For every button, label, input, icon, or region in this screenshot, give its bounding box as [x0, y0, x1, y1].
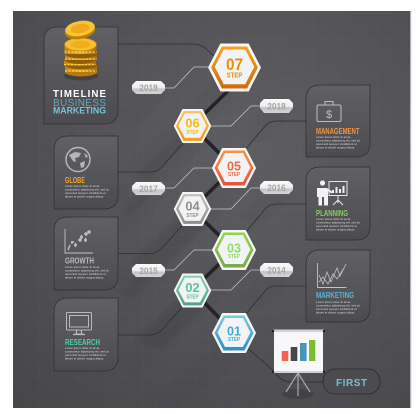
body text: growth: consectetur adipisicing elit, sed do: [65, 268, 110, 272]
title text: MARKETING: [53, 106, 106, 116]
body text: planning: Lorem ipsum dolor sit amet,: [316, 217, 351, 221]
body text: globe: Lorem ipsum dolor sit amet,: [65, 184, 100, 188]
body text: planning: [316, 217, 361, 232]
body text: research: consectetur adipisicing elit, sed do: [65, 350, 110, 354]
year tag 2019: 2019: [139, 83, 158, 93]
body text: marketing: consectetur adipisicing elit, sed do: [316, 304, 361, 308]
step 07: [209, 44, 260, 91]
body text: management: Lorem ipsum dolor sit amet,: [316, 135, 351, 139]
step 01: [212, 314, 256, 352]
step 06: 06: [185, 116, 200, 131]
connector lines: years to steps: [165, 67, 261, 290]
step 02: 02: [185, 280, 200, 295]
year tag 2016: [260, 181, 293, 194]
step 01: 01: [227, 325, 241, 339]
icon: monitor: [66, 312, 92, 334]
heading: research: RESEARCH: [65, 338, 100, 347]
heading: growth: GROWTH: [65, 256, 94, 266]
body text: management: labore et dolore magna aliqua.: [316, 146, 355, 150]
panel: growth: [54, 217, 118, 290]
body text: globe: [65, 184, 110, 198]
icon: scatter chart: [65, 229, 93, 253]
body text: research: [65, 346, 110, 360]
panel: globe: [54, 136, 118, 209]
year tag 2017: 2017: [139, 184, 158, 194]
year tag 2016: 2016: [267, 183, 286, 193]
icon: presenter with board: [317, 180, 347, 206]
year tag 2015: 2015: [139, 266, 158, 276]
step 04: [174, 192, 211, 226]
body text: planning: consectetur adipisicing elit, sed do: [316, 220, 361, 224]
year tag 2017: [132, 182, 165, 195]
step 01: STEP: [228, 337, 240, 343]
icon: money case: $: [326, 109, 332, 121]
panel: marketing: [306, 250, 370, 322]
heading: management: MANAGEMENT: [316, 127, 360, 136]
step 03: STEP: [228, 254, 240, 260]
step 05: [212, 148, 256, 188]
body text: research: Lorem ipsum dolor sit amet,: [65, 346, 100, 350]
heading: planning: PLANNING: [316, 209, 348, 218]
step 02: [174, 274, 211, 307]
body text: management: [316, 135, 361, 150]
presentation board: [272, 330, 325, 399]
body text: growth: Lorem ipsum dolor sit amet,: [65, 265, 100, 269]
step 04: STEP: [186, 213, 199, 219]
year tag 2018: 2018: [267, 102, 286, 112]
step 05: 05: [227, 160, 241, 174]
step 06: [174, 109, 211, 143]
body text: planning: eiusmod tempor incididunt ut: [316, 224, 357, 228]
year tag 2015: [132, 264, 165, 277]
year tag 2014: 2014: [267, 266, 286, 276]
connector lines: panels to steps: [118, 44, 323, 382]
step 07: STEP: [227, 72, 243, 79]
icon: globe: [66, 148, 90, 172]
step 07: 07: [226, 56, 243, 74]
step 06: STEP: [186, 130, 199, 136]
year tag 2019: [132, 81, 165, 94]
step 03: 03: [227, 242, 241, 256]
step 03: [212, 230, 256, 270]
icon: line chart: [318, 263, 346, 288]
zigzag timeline spine: [192, 85, 234, 333]
body text: globe: eiusmod tempor incididunt ut: [65, 191, 106, 195]
title text: [53, 89, 107, 116]
year tag 2014: [260, 263, 293, 277]
title text: BUSINESS: [53, 98, 106, 109]
body text: globe: labore et dolore magna aliqua.: [65, 194, 104, 198]
panel: title: [44, 19, 118, 124]
panel: management: [306, 85, 370, 157]
body text: marketing: eiusmod tempor incididunt ut: [316, 307, 357, 311]
body text: planning: labore et dolore magna aliqua.: [316, 228, 355, 232]
year tag 2018: [260, 99, 293, 113]
body text: growth: [65, 265, 110, 280]
step 05: STEP: [228, 172, 240, 178]
long cast shadows: [110, 85, 292, 406]
bar chart: [282, 340, 315, 361]
body text: marketing: labore et dolore magna aliqua.: [316, 310, 355, 314]
panel: planning: [306, 167, 370, 240]
body text: growth: labore et dolore magna aliqua.: [65, 276, 104, 280]
body text: globe: consectetur adipisicing elit, sed do: [65, 188, 110, 192]
body text: growth: eiusmod tempor incididunt ut: [65, 272, 106, 276]
step 02: STEP: [186, 294, 199, 300]
label: first: FIRST: [336, 378, 367, 389]
label: first: [323, 369, 380, 394]
step 04: 04: [185, 199, 201, 214]
body text: marketing: [316, 300, 361, 314]
body text: management: eiusmod tempor incididunt ut: [316, 142, 357, 146]
icon: gold coins: [63, 19, 98, 80]
body text: marketing: Lorem ipsum dolor sit amet,: [316, 300, 351, 304]
heading: globe: GLOBE: [65, 176, 85, 185]
body text: management: consectetur adipisicing elit, sed do: [316, 138, 361, 142]
heading: marketing: MARKETING: [316, 291, 354, 300]
body text: research: eiusmod tempor incididunt ut: [65, 353, 106, 357]
panel: research: [54, 298, 118, 371]
body text: research: labore et dolore magna aliqua.: [65, 356, 104, 360]
title text: TIMELINE: [53, 89, 107, 100]
